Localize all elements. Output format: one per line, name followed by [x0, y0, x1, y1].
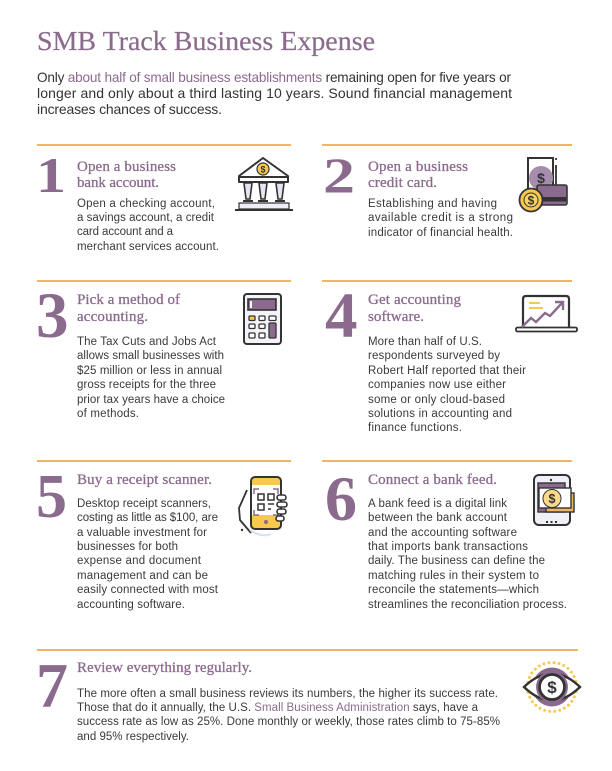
panel: step 7: Those that do it annually, the U.S. Small Business Administration says, have a	[77, 702, 479, 714]
panel: step 2: 2	[323, 147, 355, 203]
icon: calculator	[244, 294, 281, 344]
panel: step 3: $25 million or less in annual	[77, 365, 222, 377]
icon: money and credit card: $	[537, 170, 545, 186]
panel: step 3: Pick a method of	[77, 292, 180, 308]
panel: step 5: easily connected with most	[77, 584, 219, 596]
panel: step 5: accounting software.	[77, 599, 185, 611]
panel: step 6: and the accounting software	[368, 527, 517, 539]
panel: step 6	[325, 463, 574, 611]
panel: step 5: businesses for both	[77, 541, 178, 553]
panel: step 4: solutions in accounting and	[368, 408, 512, 420]
panel: step 5: Desktop receipt scanners,	[77, 498, 211, 510]
icon: mobile banking phone with cash	[534, 475, 574, 525]
panel: step 6: A bank feed is a digital link	[368, 498, 507, 510]
panel: step 1	[36, 147, 293, 253]
panel: step 5	[36, 463, 287, 611]
panel: step 7	[36, 650, 580, 743]
panel: step 2: available credit is a strong	[368, 212, 513, 224]
panel: step 6: between the bank account	[368, 512, 508, 524]
panel: step 4: Get accounting	[368, 292, 462, 308]
panel: step 1: Open a checking account,	[77, 198, 215, 210]
panel: step 3: The Tax Cuts and Jobs Act	[77, 336, 217, 348]
panel: step 6: that imports bank transactions	[368, 541, 528, 553]
panel: step 3: allows small businesses with	[77, 350, 224, 362]
panel: step 2: Establishing and having	[368, 198, 497, 210]
icon: eye with dollar	[524, 662, 580, 712]
panel: step 4: More than half of U.S.	[368, 336, 482, 348]
panel: step 4: some or only cloud-based	[368, 394, 505, 406]
intro text: increases chances of success.	[37, 101, 222, 117]
intro text: Only about half of small business establishments remaining open for five years or	[37, 70, 511, 85]
panel: step 1: merchant services account.	[77, 241, 219, 253]
panel: step 5: a valuable investment for	[77, 527, 207, 539]
panel: step 4	[325, 280, 577, 434]
panel: step 1: a savings account, a credit	[77, 212, 215, 224]
icon: bank	[235, 158, 293, 210]
panel: step 3: accounting.	[77, 309, 148, 325]
panel: step 3: gross receipts for the three	[77, 379, 216, 391]
panel: step 5: expense and document	[77, 555, 202, 567]
panel: step 6: streamlines the reconciliation process.	[368, 599, 567, 611]
panel: step 6: daily. The business can define the	[368, 555, 545, 567]
intro text: longer and only about a third lasting 10 years. Sound financial management	[37, 85, 512, 101]
panel: step 4: finance functions.	[368, 422, 462, 434]
panel: step 7: Review everything regularly.	[77, 660, 252, 676]
panel: step 5: Buy a receipt scanner.	[77, 472, 212, 488]
panel: step 2	[323, 147, 567, 239]
panel: step 4: software.	[368, 309, 424, 325]
panel: step 6: 6	[325, 463, 357, 534]
panel: step 6: matching rules in their system to	[368, 570, 539, 582]
intro text	[37, 70, 512, 117]
panel: step 1: bank account.	[77, 175, 159, 191]
panel: step 7: The more often a small business reviews its numbers, the higher its success rate.	[77, 688, 498, 700]
icon: money and credit card: $	[528, 194, 535, 208]
icon: money and credit card	[520, 158, 567, 212]
panel: step 2: credit card.	[368, 175, 437, 191]
icon: phone scanning QR code	[239, 477, 287, 535]
panel: step 2: indicator of financial health.	[368, 227, 513, 239]
panel: step 3: 3	[36, 280, 68, 352]
panel: step 6: reconcile the statements—which	[368, 584, 539, 596]
icon: laptop with growth chart	[516, 296, 577, 332]
icon: eye with dollar: $	[547, 678, 557, 697]
panel: step 7: and 95% respectively.	[77, 731, 189, 743]
panel: step 2: Open a business	[368, 159, 468, 175]
panel: step 5: 5	[36, 463, 67, 531]
panel: step 4: respondents surveyed by	[368, 350, 500, 362]
panel: step 3: of methods.	[77, 408, 139, 420]
panel: step 6: Connect a bank feed.	[368, 472, 497, 488]
panel: step 3: prior tax years have a choice	[77, 394, 225, 406]
panel: step 4: Robert Half reported that their	[368, 365, 526, 377]
panel: step 3	[36, 280, 281, 420]
panel: step 5: management and can be	[77, 570, 208, 582]
panel: step 4: 4	[325, 280, 358, 352]
panel: step 1: card account and a	[77, 226, 174, 238]
icon: bank: $	[260, 164, 266, 174]
panel: step 5: costing as little as $100, are	[77, 512, 218, 524]
panel: step 4: companies now use either	[368, 379, 506, 391]
panel: step 1: Open a business	[77, 159, 176, 175]
panel: step 1: 1	[36, 147, 66, 203]
panel: step 7: 7	[36, 650, 68, 721]
panel: step 7: success rate as low as 25%. Done monthly or weekly, those rates climb to 75-85%	[77, 716, 500, 728]
title: SMB Track Business Expense	[37, 26, 375, 56]
icon: mobile banking phone with cash: $	[549, 492, 556, 506]
